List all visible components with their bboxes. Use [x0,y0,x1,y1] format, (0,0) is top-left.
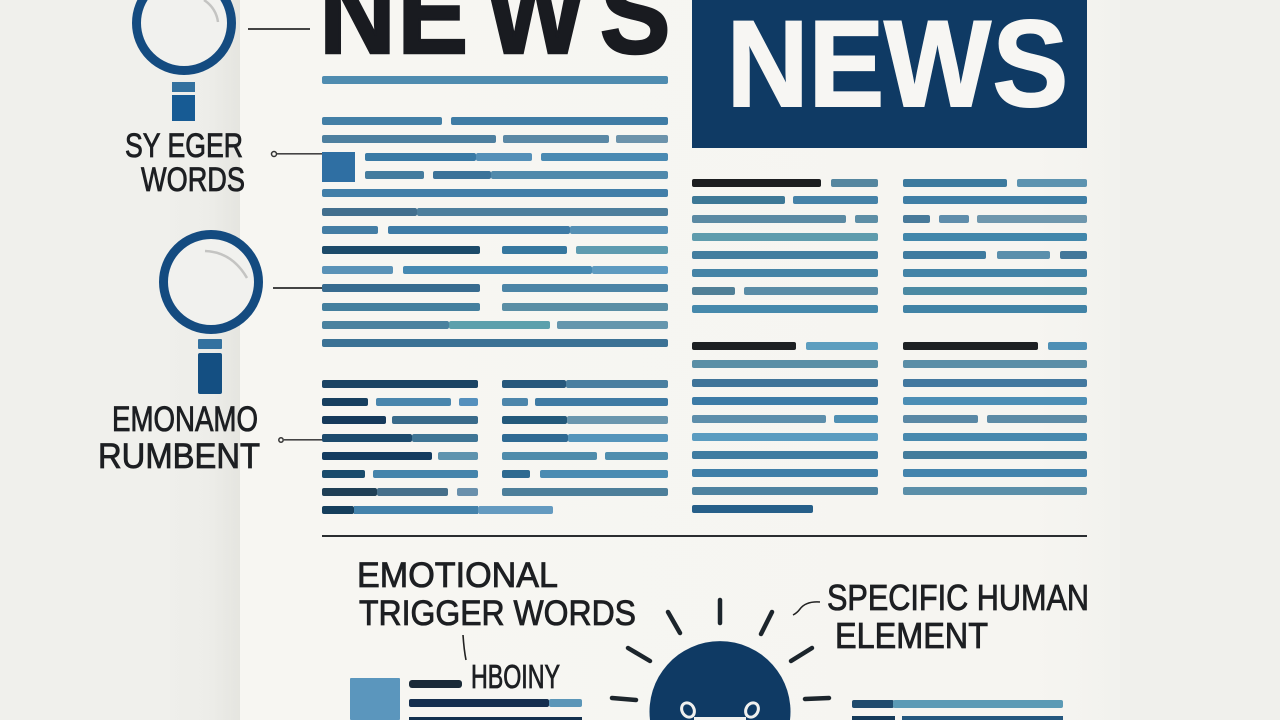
panel: bottom left lines [409,680,582,720]
label: emotional trigger words: TRIGGER WORDS [359,594,636,633]
label: SY EGER WORDS: SY EGER [125,127,243,165]
masthead rule [322,76,668,84]
label: specific human element [827,577,1089,656]
label: EMONAMO RUMBENT [98,400,260,476]
icon: light bulb with rays [612,600,829,720]
panel: left article text lines [322,117,668,347]
connector: magnifier two to article [273,287,322,289]
icon: magnifier one [136,0,232,121]
image placeholder: light blue square [350,678,400,720]
panel: right column lower lines [692,342,1087,513]
label: EMONAMO RUMBENT: RUMBENT [98,437,260,476]
section divider [322,535,1087,537]
panel: right column upper lines [692,179,1087,313]
label: specific human element: SPECIFIC HUMAN [827,577,1089,618]
connector: magnifier one to masthead [248,28,310,30]
label: emotional trigger words: EMOTIONAL [357,556,558,595]
image placeholder: blue square [322,152,355,182]
arrow: specific human squiggle [793,602,820,615]
arrow: trigger words tick [463,635,466,660]
label: SY EGER WORDS: WORDS [141,161,245,199]
label: SY EGER WORDS [125,127,245,199]
panel: bottom right lines [852,700,1063,720]
label: emotional trigger words [357,556,636,633]
panel: lower left article lines [322,380,668,514]
icon: magnifier two [164,234,258,394]
label: EMONAMO RUMBENT: EMONAMO [112,400,258,439]
connector: dot to square [272,152,322,156]
connector: dot to article [279,438,322,442]
label: HBOINY: HBOINY [471,658,560,695]
label: specific human element: ELEMENT [835,615,988,656]
